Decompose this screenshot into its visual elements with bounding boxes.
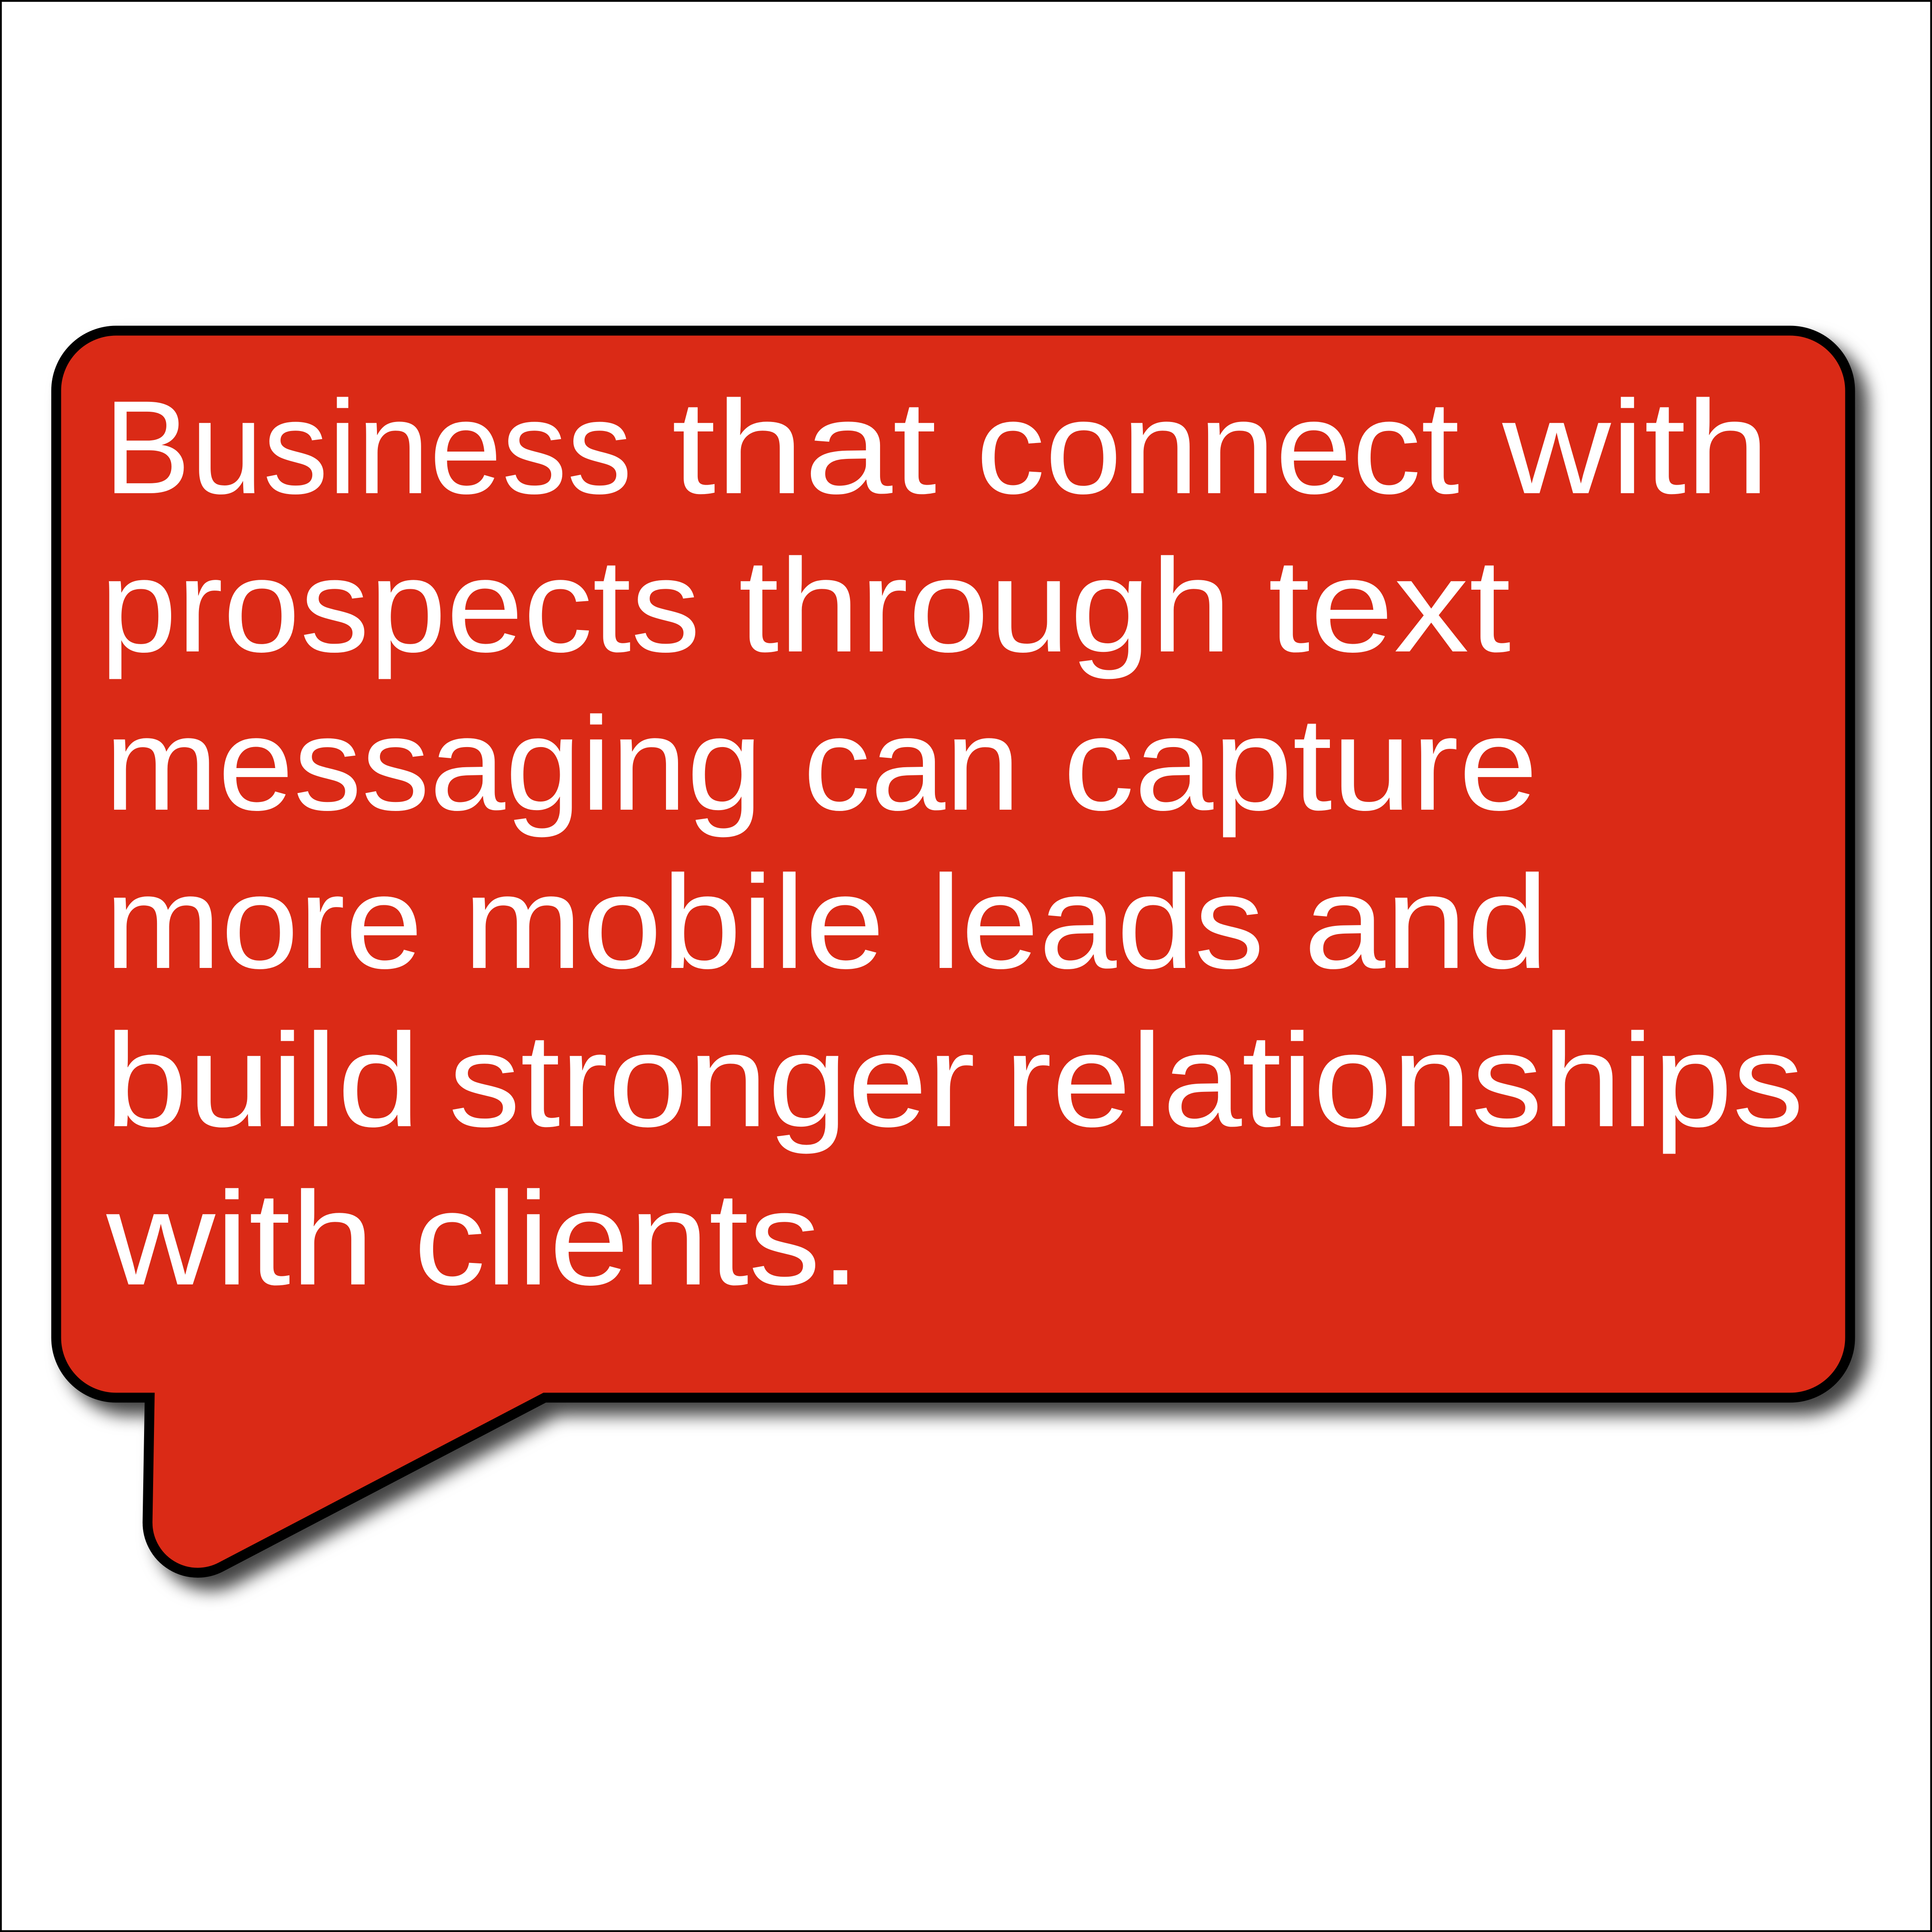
text line 6 [104,1164,860,1313]
text line 2: through [738,531,1232,681]
text line 3 [105,689,1538,839]
message text block [100,373,1804,1313]
text line 1: with [1500,373,1769,521]
text line 3: capture [1063,689,1538,839]
text line 4: leads [930,847,1264,996]
text line 4: more [105,847,423,996]
text line 5: build [105,1006,420,1154]
speech bubble panel [56,331,1850,1573]
text line 5: stronger [449,1006,975,1155]
text line 2: prospects [100,531,700,681]
text line 4: and [1304,847,1549,996]
text line 4 [105,847,1549,996]
text line 1: Business [104,373,632,521]
text line 1: that [672,373,937,521]
text line 4: mobile [463,847,885,996]
text line 3: can [803,689,1020,838]
text line 6: clients. [414,1164,860,1313]
text line 1 [104,373,1769,521]
text line 1: connect [976,373,1460,521]
text line 2: text [1268,531,1511,680]
text line 3: messaging [105,689,763,839]
text line 6: with [104,1164,374,1313]
text line 5: relationships [1004,1006,1804,1155]
text line 5 [105,1006,1804,1155]
text line 2 [100,531,1511,681]
